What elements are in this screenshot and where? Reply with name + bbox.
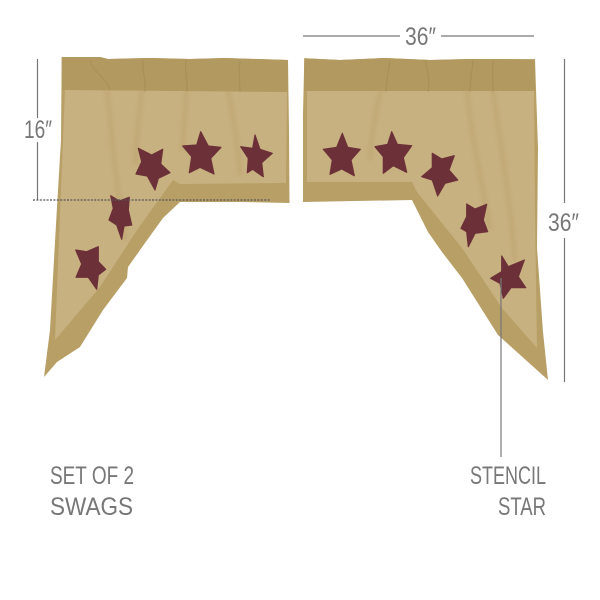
right curtain star 4 xyxy=(461,204,488,247)
caption: stencil star xyxy=(470,462,546,521)
right curtain star 5 xyxy=(491,256,526,298)
stencil word: STENCIL xyxy=(470,462,546,490)
set of 2 words: SET OF 2 xyxy=(50,462,134,490)
36 inch length label: 36″ xyxy=(548,209,579,237)
16 inch vertical line xyxy=(36,59,38,200)
right curtain folds xyxy=(372,141,373,142)
36 inch width line xyxy=(303,35,534,37)
caption: set of 2 swags xyxy=(50,462,134,521)
right curtain burlap border xyxy=(303,58,548,380)
right curtain star 1 xyxy=(323,133,360,176)
right curtain star 2 xyxy=(375,132,412,173)
left curtain star 1 xyxy=(241,135,272,177)
stencil star leader line xyxy=(500,278,502,457)
right swag curtain xyxy=(303,58,548,380)
left curtain top pleats xyxy=(90,60,240,92)
right curtain top band xyxy=(304,58,535,91)
left curtain star 5 xyxy=(76,247,106,289)
right curtain top pleats xyxy=(386,60,493,92)
left swag curtain xyxy=(44,57,290,377)
left curtain light panel xyxy=(55,90,287,340)
36 inch width label: 36″ xyxy=(405,23,436,51)
left curtain top band xyxy=(62,57,288,92)
left curtain burlap border xyxy=(44,57,290,377)
left curtain folds xyxy=(107,90,240,240)
16 inch label: 16″ xyxy=(24,116,52,144)
right curtain light panel xyxy=(307,91,537,348)
left curtain star 2 xyxy=(183,132,221,174)
swags word: SWAGS xyxy=(50,493,133,521)
star word: STAR xyxy=(498,493,546,521)
36 inch length line xyxy=(564,59,566,382)
right curtain star 3 xyxy=(422,153,458,196)
16 inch dotted guide xyxy=(33,199,270,201)
left curtain star 4 xyxy=(109,196,132,239)
left curtain star 3 xyxy=(136,148,170,190)
